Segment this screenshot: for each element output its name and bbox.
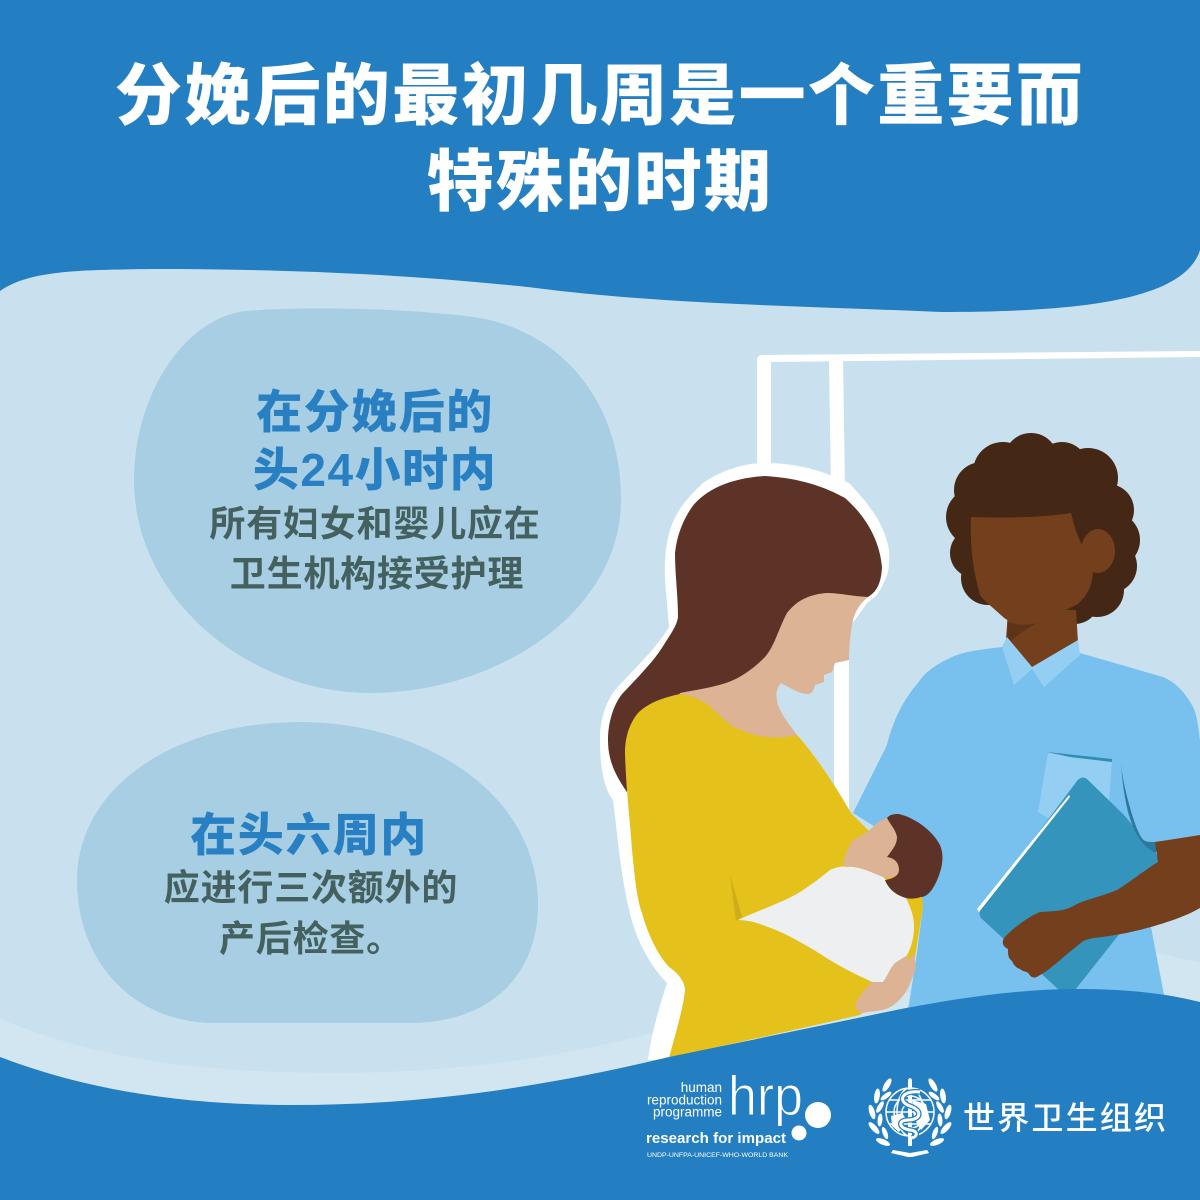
panel: first 24 hours: [134, 308, 621, 693]
folder: [977, 778, 1170, 990]
illustration: nurse: [853, 433, 1200, 1010]
sleeve shadow: [1121, 762, 1160, 853]
illustration: mother and baby: [600, 463, 942, 1060]
heading: first six weeks: 在头六周内: [190, 809, 428, 861]
HRP programme name: reproduction: [647, 1092, 722, 1108]
text: facility care: 卫生机构接受护理: [230, 553, 524, 594]
title: 分娩后的最初几周是一个重要而: [115, 59, 1085, 134]
window frame: [757, 351, 1200, 815]
nurse hair: [946, 433, 1140, 624]
text: postnatal checks: 应进行三次额外的: [164, 867, 458, 908]
mother dress: [625, 694, 923, 1058]
shirt sleeve: [1121, 720, 1200, 842]
nurse arm and hand: [1003, 835, 1200, 978]
text: facility care: [209, 503, 541, 594]
HRP programme name: programme: [653, 1104, 722, 1120]
title: [115, 59, 1085, 220]
heading: first 24 hours: [253, 386, 497, 496]
mother hair: [608, 476, 882, 792]
logo: HRP: [646, 1064, 831, 1159]
text: postnatal checks: 产后检查。: [219, 918, 403, 959]
mother hand: [856, 953, 916, 1013]
HRP programme name: [647, 1080, 722, 1120]
HRP partners: UNDP-UNFPA-UNICEF-WHO-WORLD BANK: [647, 1152, 789, 1159]
text: postnatal checks: [164, 867, 458, 959]
logo: WHO emblem: [867, 1077, 953, 1157]
laurel wreath: [867, 1077, 953, 1157]
globe: [886, 1088, 934, 1136]
shirt collar: [1002, 637, 1080, 687]
mother face and neck: [660, 585, 868, 760]
staff and serpent: [901, 1078, 920, 1146]
panel: first six weeks: [77, 722, 538, 1023]
heading: first 24 hours: 在分娩后的: [256, 386, 494, 438]
baby face: [843, 818, 899, 878]
HRP dots: [792, 1102, 831, 1140]
shirt pocket: [1038, 752, 1112, 830]
WHO name: 世界卫生组织: [963, 1100, 1168, 1136]
baby blanket: [738, 866, 914, 983]
bottom blue footer band: [0, 989, 1200, 1200]
nurse ear: [1081, 529, 1115, 573]
text: facility care: 所有妇女和婴儿应在: [209, 503, 541, 544]
HRP tagline: research for impact: [646, 1131, 786, 1147]
top blue header band: [0, 0, 1200, 312]
baby hair: [885, 814, 942, 899]
nurse neck: [1006, 610, 1078, 668]
nurse shirt: [853, 647, 1200, 1010]
nurse face: [971, 513, 1093, 624]
HRP letters: hrp: [728, 1064, 803, 1127]
heading: first 24 hours: 头24小时内: [253, 444, 497, 496]
title: 特殊的时期: [427, 145, 773, 220]
HRP programme name: human: [681, 1080, 722, 1095]
mother white outline: [600, 463, 889, 1060]
continents: [891, 1100, 930, 1132]
dress fold shadow: [730, 875, 742, 921]
neck shadow: [1007, 622, 1037, 641]
